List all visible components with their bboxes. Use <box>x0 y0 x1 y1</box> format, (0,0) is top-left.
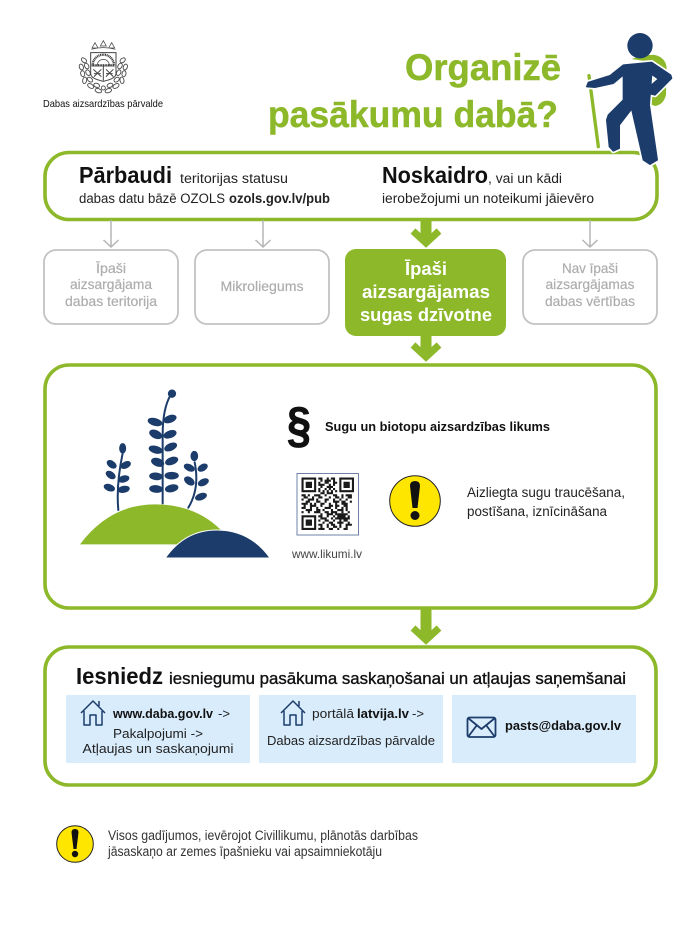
heading: Iesniedz <box>76 663 626 689</box>
footer note: jāsaskaņo ar zemes īpašnieku vai apsaimniekotāju <box>107 844 382 859</box>
box: protected nature territory: Īpaši <box>96 260 126 276</box>
arrow: habitat to law panel <box>413 336 439 357</box>
text: prohibition: Aizliegta sugu traucēšana, <box>467 485 625 500</box>
box: protected nature territory <box>44 250 178 324</box>
text: Pārbaudi: Pārbaudi <box>79 162 172 188</box>
text: Noskaidro: ierobežojumi un noteikumi jāievēro <box>382 191 594 206</box>
box: no protected values: dabas vērtības <box>545 293 635 309</box>
heading: Iesniedz: iesniegumu pasākuma saskaņošanai un atļaujas saņemšanai <box>169 670 626 688</box>
footer note: Visos gadījumos, ievērojot Civillikumu, plānotās darbības <box>108 828 418 843</box>
title: pasākumu dabā? <box>268 94 558 135</box>
box: protected nature territory: aizsargājama <box>70 276 152 292</box>
box: no protected values <box>523 250 657 324</box>
arrow: law to application panel <box>413 608 439 640</box>
cell: daba.gov.lv: Atļaujas un saskaņojumi <box>82 741 234 756</box>
box: micro-reserve: Mikroliegums <box>220 278 304 294</box>
cell: email: pasts@daba.gov.lv <box>505 719 621 733</box>
QR code <box>297 474 358 535</box>
cell: daba.gov.lv <box>66 695 250 763</box>
law title: Sugu un biotopu aizsardzības likums <box>325 419 550 434</box>
icon: paragraph sign: § <box>287 397 311 453</box>
panel: submit application <box>45 647 656 785</box>
logo: coat of arms <box>78 41 128 94</box>
title <box>268 47 561 135</box>
QR caption: www.likumi.lv <box>291 547 362 561</box>
cell: latvija.lv <box>259 695 443 763</box>
cell: latvija.lv: -> <box>412 707 424 721</box>
cell: latvija.lv: latvija.lv <box>357 707 409 721</box>
box: protected species habitat: Īpaši <box>404 259 447 279</box>
title: Organizē <box>405 47 561 88</box>
heading: Iesniedz: Iesniedz <box>76 663 163 689</box>
arrow: to micro-reserve <box>256 220 270 247</box>
panel: check status <box>45 152 657 220</box>
text: Noskaidro: , vai un kādi <box>488 171 562 186</box>
box: protected species habitat: aizsargājamas <box>362 282 490 302</box>
cell: latvija.lv: portālā <box>312 707 354 721</box>
icon: hiker <box>587 33 672 164</box>
text: Pārbaudi: ozols.gov.lv/pub <box>229 191 330 206</box>
text: Noskaidro <box>382 162 594 206</box>
text: prohibition <box>467 485 625 519</box>
box: protected species habitat: sugas dzīvotne <box>360 305 492 325</box>
cell: latvija.lv: Dabas aizsardzības pārvalde <box>267 733 435 748</box>
logo caption: Dabas aizsardzības pārvalde <box>43 99 163 110</box>
icon: warning <box>57 826 93 862</box>
cell: daba.gov.lv: Pakalpojumi -> <box>113 726 203 741</box>
text: Pārbaudi: teritorijas statusu <box>180 171 288 186</box>
arrow: to protected territory <box>104 220 118 247</box>
illustration: plants and hills <box>80 390 270 558</box>
cell: daba.gov.lv: -> <box>218 707 230 721</box>
footer note <box>107 828 418 859</box>
text: Pārbaudi <box>79 162 330 206</box>
text: Pārbaudi: dabas datu bāzē OZOLS <box>79 191 225 206</box>
text: Noskaidro: Noskaidro <box>382 162 488 188</box>
icon: house <box>281 701 305 725</box>
arrow: to no protected values <box>582 220 598 247</box>
cell: daba.gov.lv: www.daba.gov.lv <box>112 707 213 721</box>
box: micro-reserve <box>195 250 329 324</box>
text: prohibition: postīšana, iznīcināšana <box>467 504 607 519</box>
panel: species protection law <box>45 365 656 608</box>
cell: email <box>452 695 636 763</box>
box: protected nature territory: dabas teritorija <box>65 293 157 309</box>
box: protected species habitat <box>345 249 506 336</box>
box: no protected values: Nav īpaši <box>562 260 618 276</box>
icon: house <box>81 701 105 725</box>
arrow: to habitat <box>413 220 439 243</box>
icon: envelope <box>468 718 496 737</box>
box: no protected values: aizsargājamas <box>546 276 634 292</box>
icon: warning <box>390 476 440 526</box>
